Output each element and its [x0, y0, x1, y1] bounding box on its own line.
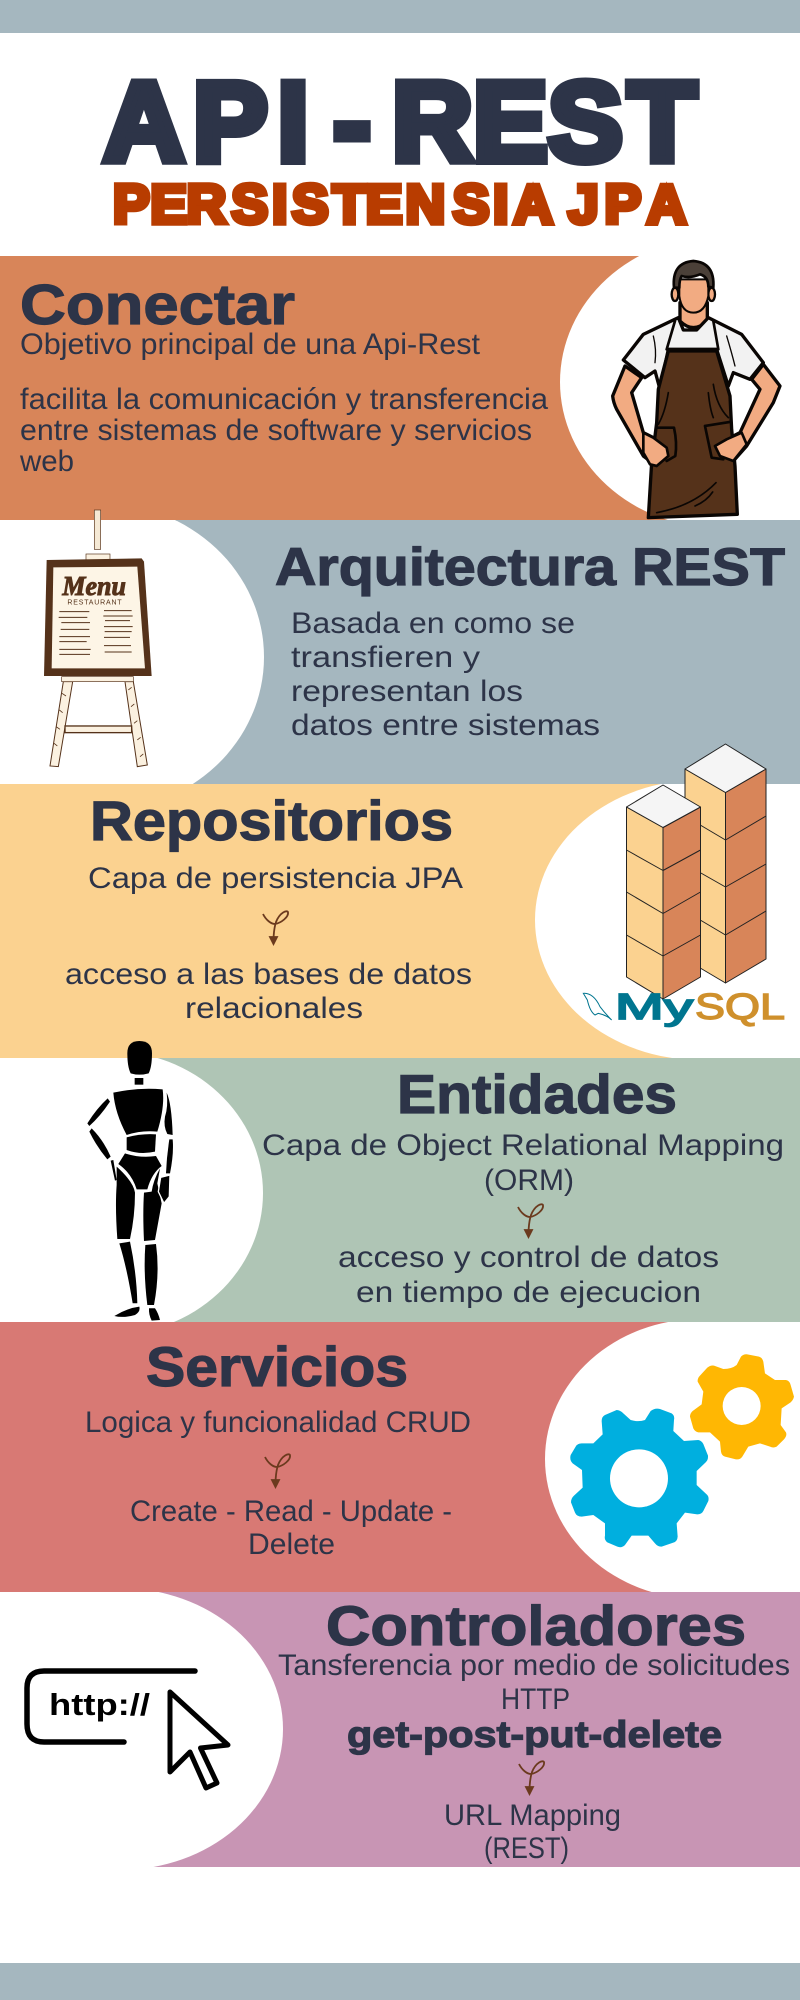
text block: objective — [19, 328, 548, 478]
text block: description: datos entre sistemas — [291, 709, 600, 742]
icon: menu board on easel: Menu — [61, 571, 126, 601]
panel: Entidades — [87, 1041, 800, 1322]
icon: http browser bar with cursor: http:// — [49, 1687, 150, 1722]
arrow: squiggle — [519, 1761, 544, 1794]
panel: Controladores — [0, 1588, 800, 1870]
text block: verbs: get-post-put-delete — [347, 1714, 722, 1755]
text block: ORM: (ORM) — [484, 1164, 574, 1197]
text block: data control — [338, 1241, 719, 1309]
icon: menu board on easel — [44, 510, 152, 767]
text block: objective: facilita la comunicación y transferencia — [20, 383, 548, 416]
text block: description — [291, 607, 600, 742]
text block: data control: acceso y control de datos — [338, 1241, 719, 1274]
arrow: squiggle — [265, 1454, 290, 1487]
text block: description: transfieren y — [291, 641, 480, 674]
text block: HTTP transfer: Tansferencia por medio de solicitudes — [278, 1649, 790, 1682]
text block: CRUD: Logica y funcionalidad CRUD — [85, 1406, 471, 1439]
text block: database access: acceso a las bases de datos — [65, 958, 472, 991]
heading: Entidades: Entidades — [397, 1063, 677, 1125]
heading: Servicios: Servicios — [146, 1335, 408, 1398]
text block: operations — [130, 1495, 452, 1561]
text block: objective: web — [19, 445, 74, 478]
text block: description: Basada en como se — [291, 607, 575, 640]
text block: operations: Delete — [248, 1528, 335, 1561]
bottom bar — [0, 1963, 800, 2000]
text block: objective: Objetivo principal de una Api-Rest — [20, 328, 481, 361]
text block: HTTP transfer: HTTP — [501, 1683, 570, 1716]
icon: MySQL logo: My — [615, 986, 693, 1027]
icon: http browser bar with cursor — [27, 1671, 228, 1788]
text block: ORM: Capa de Object Relational Mapping — [262, 1129, 784, 1162]
heading: Arquitectura REST: Arquitectura REST — [275, 538, 785, 597]
heading: Repositorios: Repositorios — [90, 789, 453, 852]
icon: man with apron — [613, 261, 780, 518]
text block: description: representan los — [291, 675, 523, 708]
icon: menu board on easel: RESTAURANT — [67, 600, 122, 607]
panel: Conectar — [0, 256, 782, 520]
text block: database access: relacionales — [185, 992, 363, 1025]
text block: URL mapping — [444, 1799, 621, 1865]
icon: mannequin — [87, 1041, 173, 1321]
panel: Arquitectura REST — [44, 510, 800, 784]
subtitle: PERSISTENSIA JPA — [113, 173, 687, 235]
text block: data control: en tiempo de ejecucion — [356, 1276, 701, 1309]
icon: MySQL logo — [583, 986, 785, 1027]
arrow: squiggle — [263, 911, 288, 944]
title — [104, 60, 696, 235]
panel: Servicios — [0, 1319, 800, 1599]
icon: MySQL logo: SQL — [695, 986, 785, 1027]
icon: stacked cubes — [626, 744, 766, 999]
main heading: API - REST — [104, 60, 696, 184]
heading: Controladores: Controladores — [326, 1594, 746, 1657]
text block: ORM — [262, 1129, 784, 1197]
text block: database access — [65, 958, 472, 1025]
icon: gears — [570, 1354, 794, 1547]
text block: URL mapping: URL Mapping — [444, 1799, 621, 1832]
text block: HTTP transfer — [278, 1649, 790, 1716]
text block: persistence: Capa de persistencia JPA — [88, 862, 463, 895]
text block: objective: entre sistemas de software y servicios — [20, 414, 532, 447]
panel: Repositorios — [0, 744, 800, 1060]
text block: URL mapping: (REST) — [484, 1832, 569, 1865]
arrow: squiggle — [518, 1204, 543, 1237]
top bar — [0, 0, 800, 33]
heading: Conectar: Conectar — [20, 273, 295, 337]
text block: operations: Create - Read - Update - — [130, 1495, 452, 1528]
